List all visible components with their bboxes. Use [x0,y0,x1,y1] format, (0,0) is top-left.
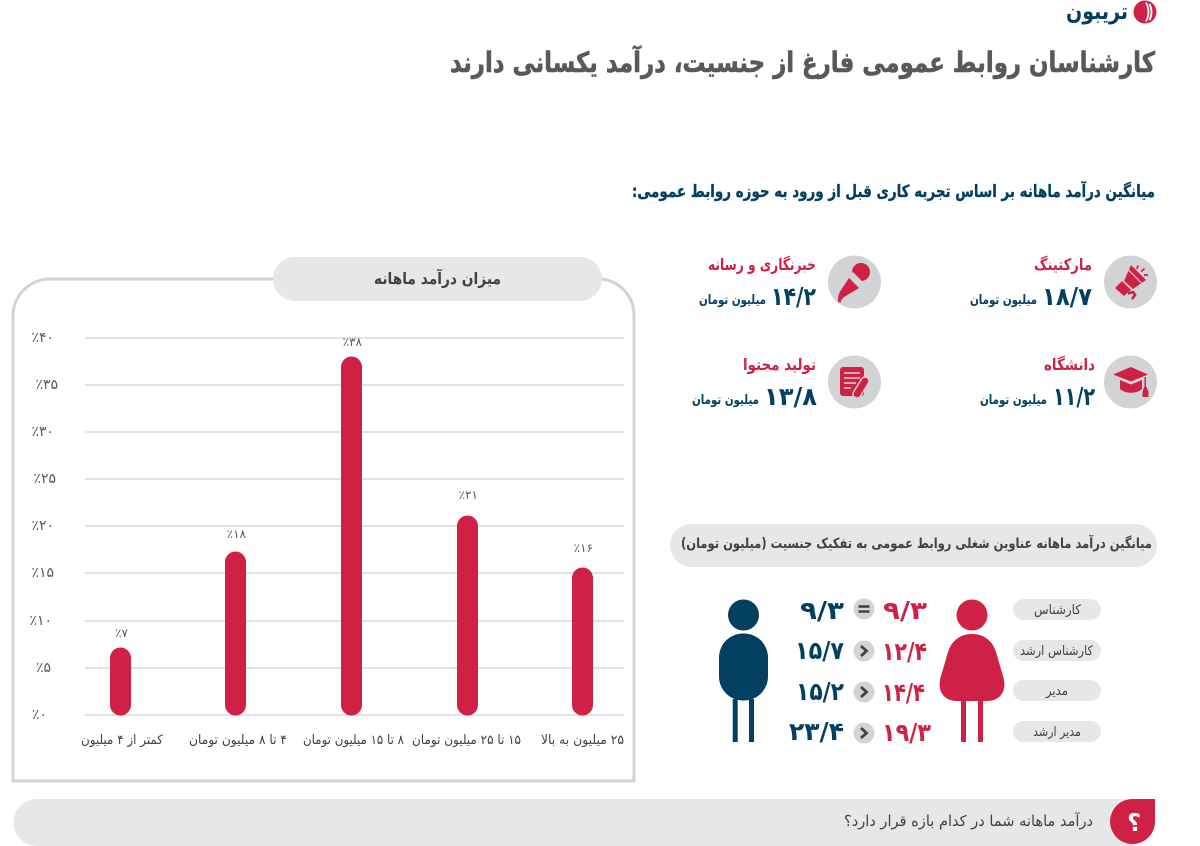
male income values: ۱۵/۷ [795,636,844,665]
job title labels: کارشناس ارشد [1020,644,1094,659]
card: journalism and media: ۱۴/۲ [771,282,816,311]
card: marketing: مارکتینگ [1034,255,1092,274]
card: marketing [970,255,1157,311]
icon: question badge [1110,799,1155,844]
female income values: ۱۴/۴ [882,678,925,707]
male income values: ۱۵/۲ [796,677,844,706]
card: journalism and media: خبرنگاری و رسانه [708,255,816,274]
x axis labels [81,733,624,748]
bars [110,356,593,716]
y axis labels [29,330,58,723]
icon: microphone [838,263,870,302]
female income values: ۱۲/۴ [882,637,927,666]
icon: question badge: ؟ [1127,809,1141,837]
icon: male figure [719,600,768,742]
icon: document and pencil [840,367,865,396]
question bar: درآمد ماهانه شما در کدام بازه قرار دارد؟ [844,812,1093,830]
question bar [13,799,1155,846]
chart heading pill [273,257,602,301]
gender panel heading [670,524,1157,567]
comparison signs [854,598,874,744]
y axis labels: ٪۲۰ [31,518,54,534]
female income values: ۹/۳ [883,596,927,625]
card: content production: میلیون تومان [692,393,759,408]
card: journalism and media [699,255,881,311]
male income values: ۹/۳ [800,596,844,625]
x axis labels: کمتر از ۴ میلیون [81,733,164,748]
male income values [789,596,844,746]
job title labels: مدیر ارشد [1033,725,1081,740]
card: journalism and media: میلیون تومان [699,293,766,308]
bar values: ٪۷ [115,626,129,640]
y axis labels: ٪۲۵ [33,471,56,487]
card: university: دانشگاه [1044,355,1095,374]
bar values: ٪۳۸ [343,335,363,349]
bar values: ٪۲۱ [459,488,478,502]
job title labels [1013,599,1101,742]
x axis labels: ۲۵ میلیون به بالا [541,733,624,748]
job title labels: کارشناس [1034,603,1082,618]
y axis labels: ٪۰ [32,707,47,723]
card: content production [692,355,881,411]
bar values: ٪۱۶ [574,541,593,555]
bar values [115,335,593,640]
card: content production: ۱۳/۸ [764,382,817,411]
icon: female figure [940,600,1004,742]
card: university: میلیون تومان [980,393,1047,408]
card: university [980,355,1157,411]
female income values: ۱۹/۳ [882,718,931,747]
male income values: ۲۳/۴ [789,717,844,746]
y axis labels: ٪۵ [36,660,51,676]
icon: graduation cap [1113,367,1148,397]
panel: monthly income chart [13,257,634,781]
x axis labels: ۱۵ تا ۲۵ میلیون تومان [412,733,521,748]
x axis labels: ۸ تا ۱۵ میلیون تومان [303,733,404,748]
icon: megaphone [1115,265,1148,299]
job title labels: مدیر [1045,684,1068,699]
female income values [882,596,931,747]
x axis labels: ۴ تا ۸ میلیون تومان [189,733,287,748]
y axis labels: ٪۴۰ [31,330,54,346]
panel: income by gender [670,524,1157,747]
y axis labels: ٪۳۰ [31,424,54,440]
card: university: ۱۱/۲ [1053,382,1095,411]
card: marketing: میلیون تومان [970,293,1037,308]
card: content production: تولید محتوا [743,355,816,374]
card: marketing: ۱۸/۷ [1042,282,1092,311]
y axis labels: ٪۳۵ [35,377,58,393]
bar values: ٪۱۸ [227,527,247,541]
chart heading pill: میزان درآمد ماهانه [374,268,501,288]
y axis labels: ٪۱۵ [31,565,54,581]
y axis labels: ٪۱۰ [29,613,52,629]
